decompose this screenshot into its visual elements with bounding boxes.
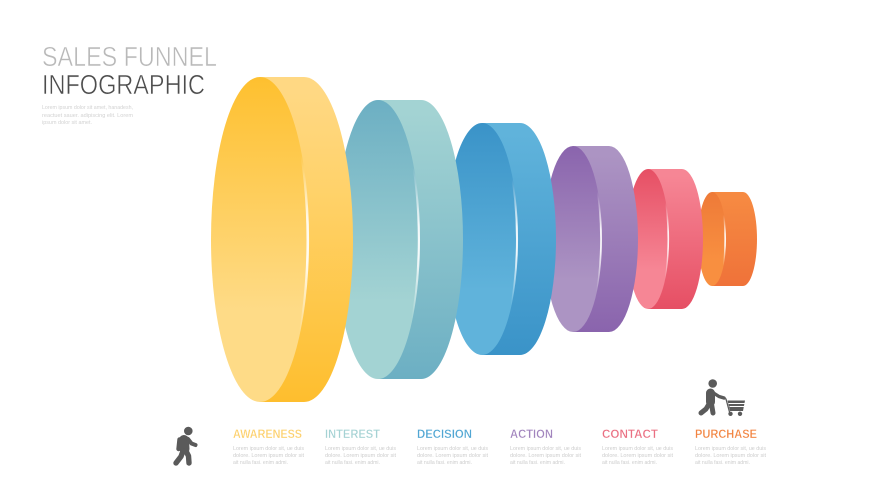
stage: decision: DECISION: [417, 429, 472, 441]
stage: purchase: dolore. Lorem ipsum dolor sit: [695, 453, 767, 459]
stage: awareness: Lorem ipsum dolor sit, ue duis: [233, 446, 304, 452]
stage: action: [510, 429, 582, 466]
stage: contact: CONTACT: [602, 429, 658, 441]
stage: purchase: ait nulla fasi. enim admi.: [695, 460, 750, 466]
intro text block: Lorem ipsum dolor sit amet, hanadesh,: [42, 105, 133, 111]
stage: action: ACTION: [510, 429, 553, 441]
disc: action: [544, 146, 638, 332]
title: INFOGRAPHIC: [42, 69, 205, 100]
stage: decision: ait nulla fasi. enim admi.: [417, 460, 472, 466]
stage: interest: INTEREST: [325, 429, 380, 441]
title: SALES FUNNEL: [42, 41, 217, 72]
disc: contact: [627, 169, 703, 309]
intro text block: ipsum dolor sit amet.: [42, 120, 92, 126]
stage: decision: Lorem ipsum dolor sit, ue duis: [417, 446, 488, 452]
title: [42, 41, 217, 100]
stage: awareness: AWARENESS: [233, 429, 302, 441]
stage: interest: Lorem ipsum dolor sit, ue duis: [325, 446, 396, 452]
intro text block: reactuet sauer. adipiscing elit. Lorem: [42, 113, 133, 119]
stage: contact: dolore. Lorem ipsum dolor sit: [602, 453, 674, 459]
stage: awareness: [233, 429, 305, 466]
stage: interest: [325, 429, 397, 466]
stage: action: Lorem ipsum dolor sit, ue duis: [510, 446, 581, 452]
icon: person with shopping cart: [701, 379, 745, 416]
stage: action: dolore. Lorem ipsum dolor sit: [510, 453, 582, 459]
stage: purchase: Lorem ipsum dolor sit, ue duis: [695, 446, 766, 452]
stage: contact: Lorem ipsum dolor sit, ue duis: [602, 446, 673, 452]
disc: decision: [446, 123, 556, 355]
stage: contact: ait nulla fasi. enim admi.: [602, 460, 657, 466]
icon: walking person: [176, 427, 196, 463]
funnel chart: [211, 77, 757, 402]
stage: action: ait nulla fasi. enim admi.: [510, 460, 565, 466]
intro text block: [42, 105, 133, 126]
stage: decision: [417, 429, 489, 466]
disc: interest: [336, 100, 463, 379]
stage: awareness: dolore. Lorem ipsum dolor sit: [233, 453, 305, 459]
stage: purchase: [695, 429, 767, 466]
stage: interest: dolore. Lorem ipsum dolor sit: [325, 453, 397, 459]
stage: decision: dolore. Lorem ipsum dolor sit: [417, 453, 489, 459]
disc: purchase: [698, 192, 757, 286]
stage: contact: [602, 429, 674, 466]
disc: awareness: [211, 77, 353, 402]
stage: awareness: ait nulla fasi. enim admi.: [233, 460, 288, 466]
stage: interest: ait nulla fasi. enim admi.: [325, 460, 380, 466]
stage: purchase: PURCHASE: [695, 429, 757, 441]
